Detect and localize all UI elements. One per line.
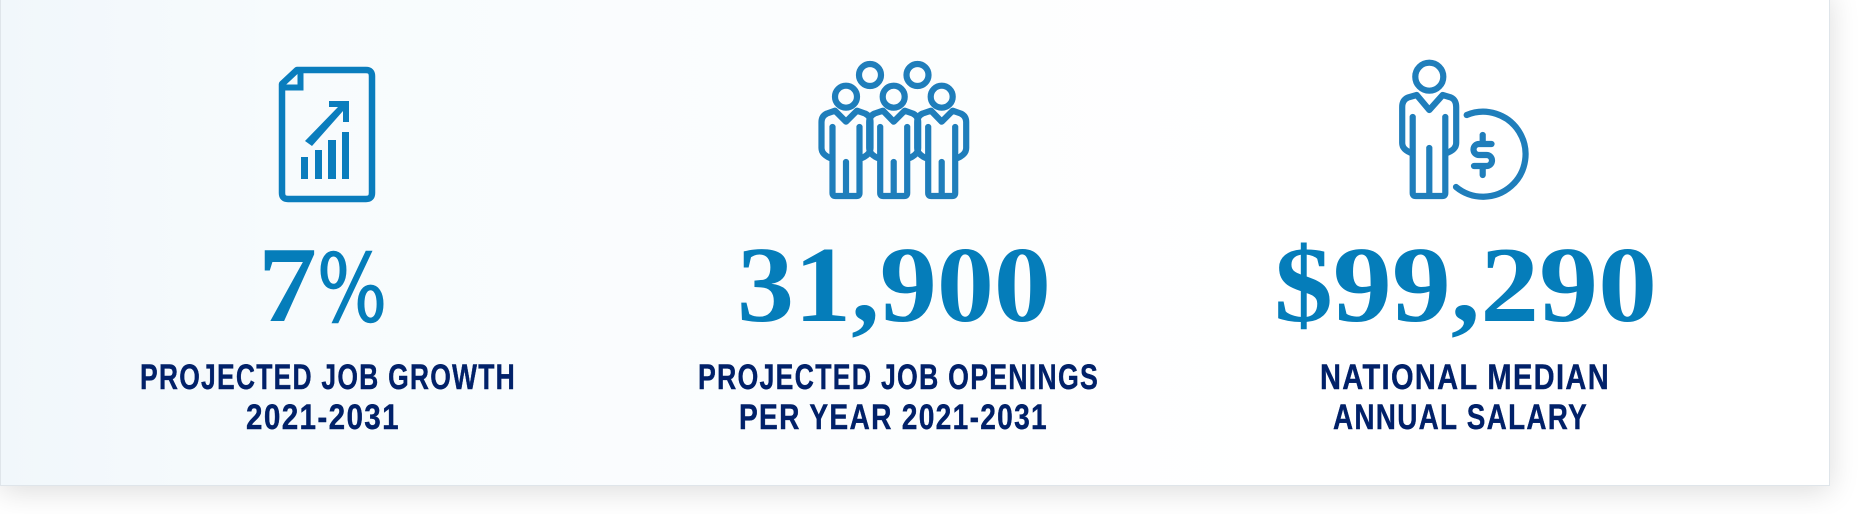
label: projected job openings: PER YEAR 2021-2031 — [739, 398, 1048, 437]
stat: projected job growth — [140, 70, 516, 437]
icon: person with dollar coin — [1402, 63, 1526, 197]
label: projected job openings — [698, 358, 1099, 437]
label: projected job growth — [140, 358, 516, 437]
label: projected job openings: PROJECTED JOB OPENINGS — [698, 358, 1099, 397]
label: national median annual salary — [1320, 358, 1610, 437]
label: national median annual salary: NATIONAL MEDIAN — [1320, 358, 1610, 397]
label: projected job growth: PROJECTED JOB GROWTH — [140, 358, 516, 397]
icon: document with growth chart — [282, 70, 372, 199]
value: 31,900: 31,900 — [737, 226, 1051, 345]
label: projected job growth: 2021-2031 — [246, 398, 400, 437]
icon: group of people — [822, 64, 966, 196]
stat: national median salary — [1274, 63, 1657, 437]
value: 7%: 7% — [258, 226, 387, 345]
label: national median annual salary: ANNUAL SALARY — [1333, 398, 1588, 437]
stat: projected job openings — [698, 64, 1099, 437]
value: $99,290: $99,290 — [1274, 226, 1657, 345]
